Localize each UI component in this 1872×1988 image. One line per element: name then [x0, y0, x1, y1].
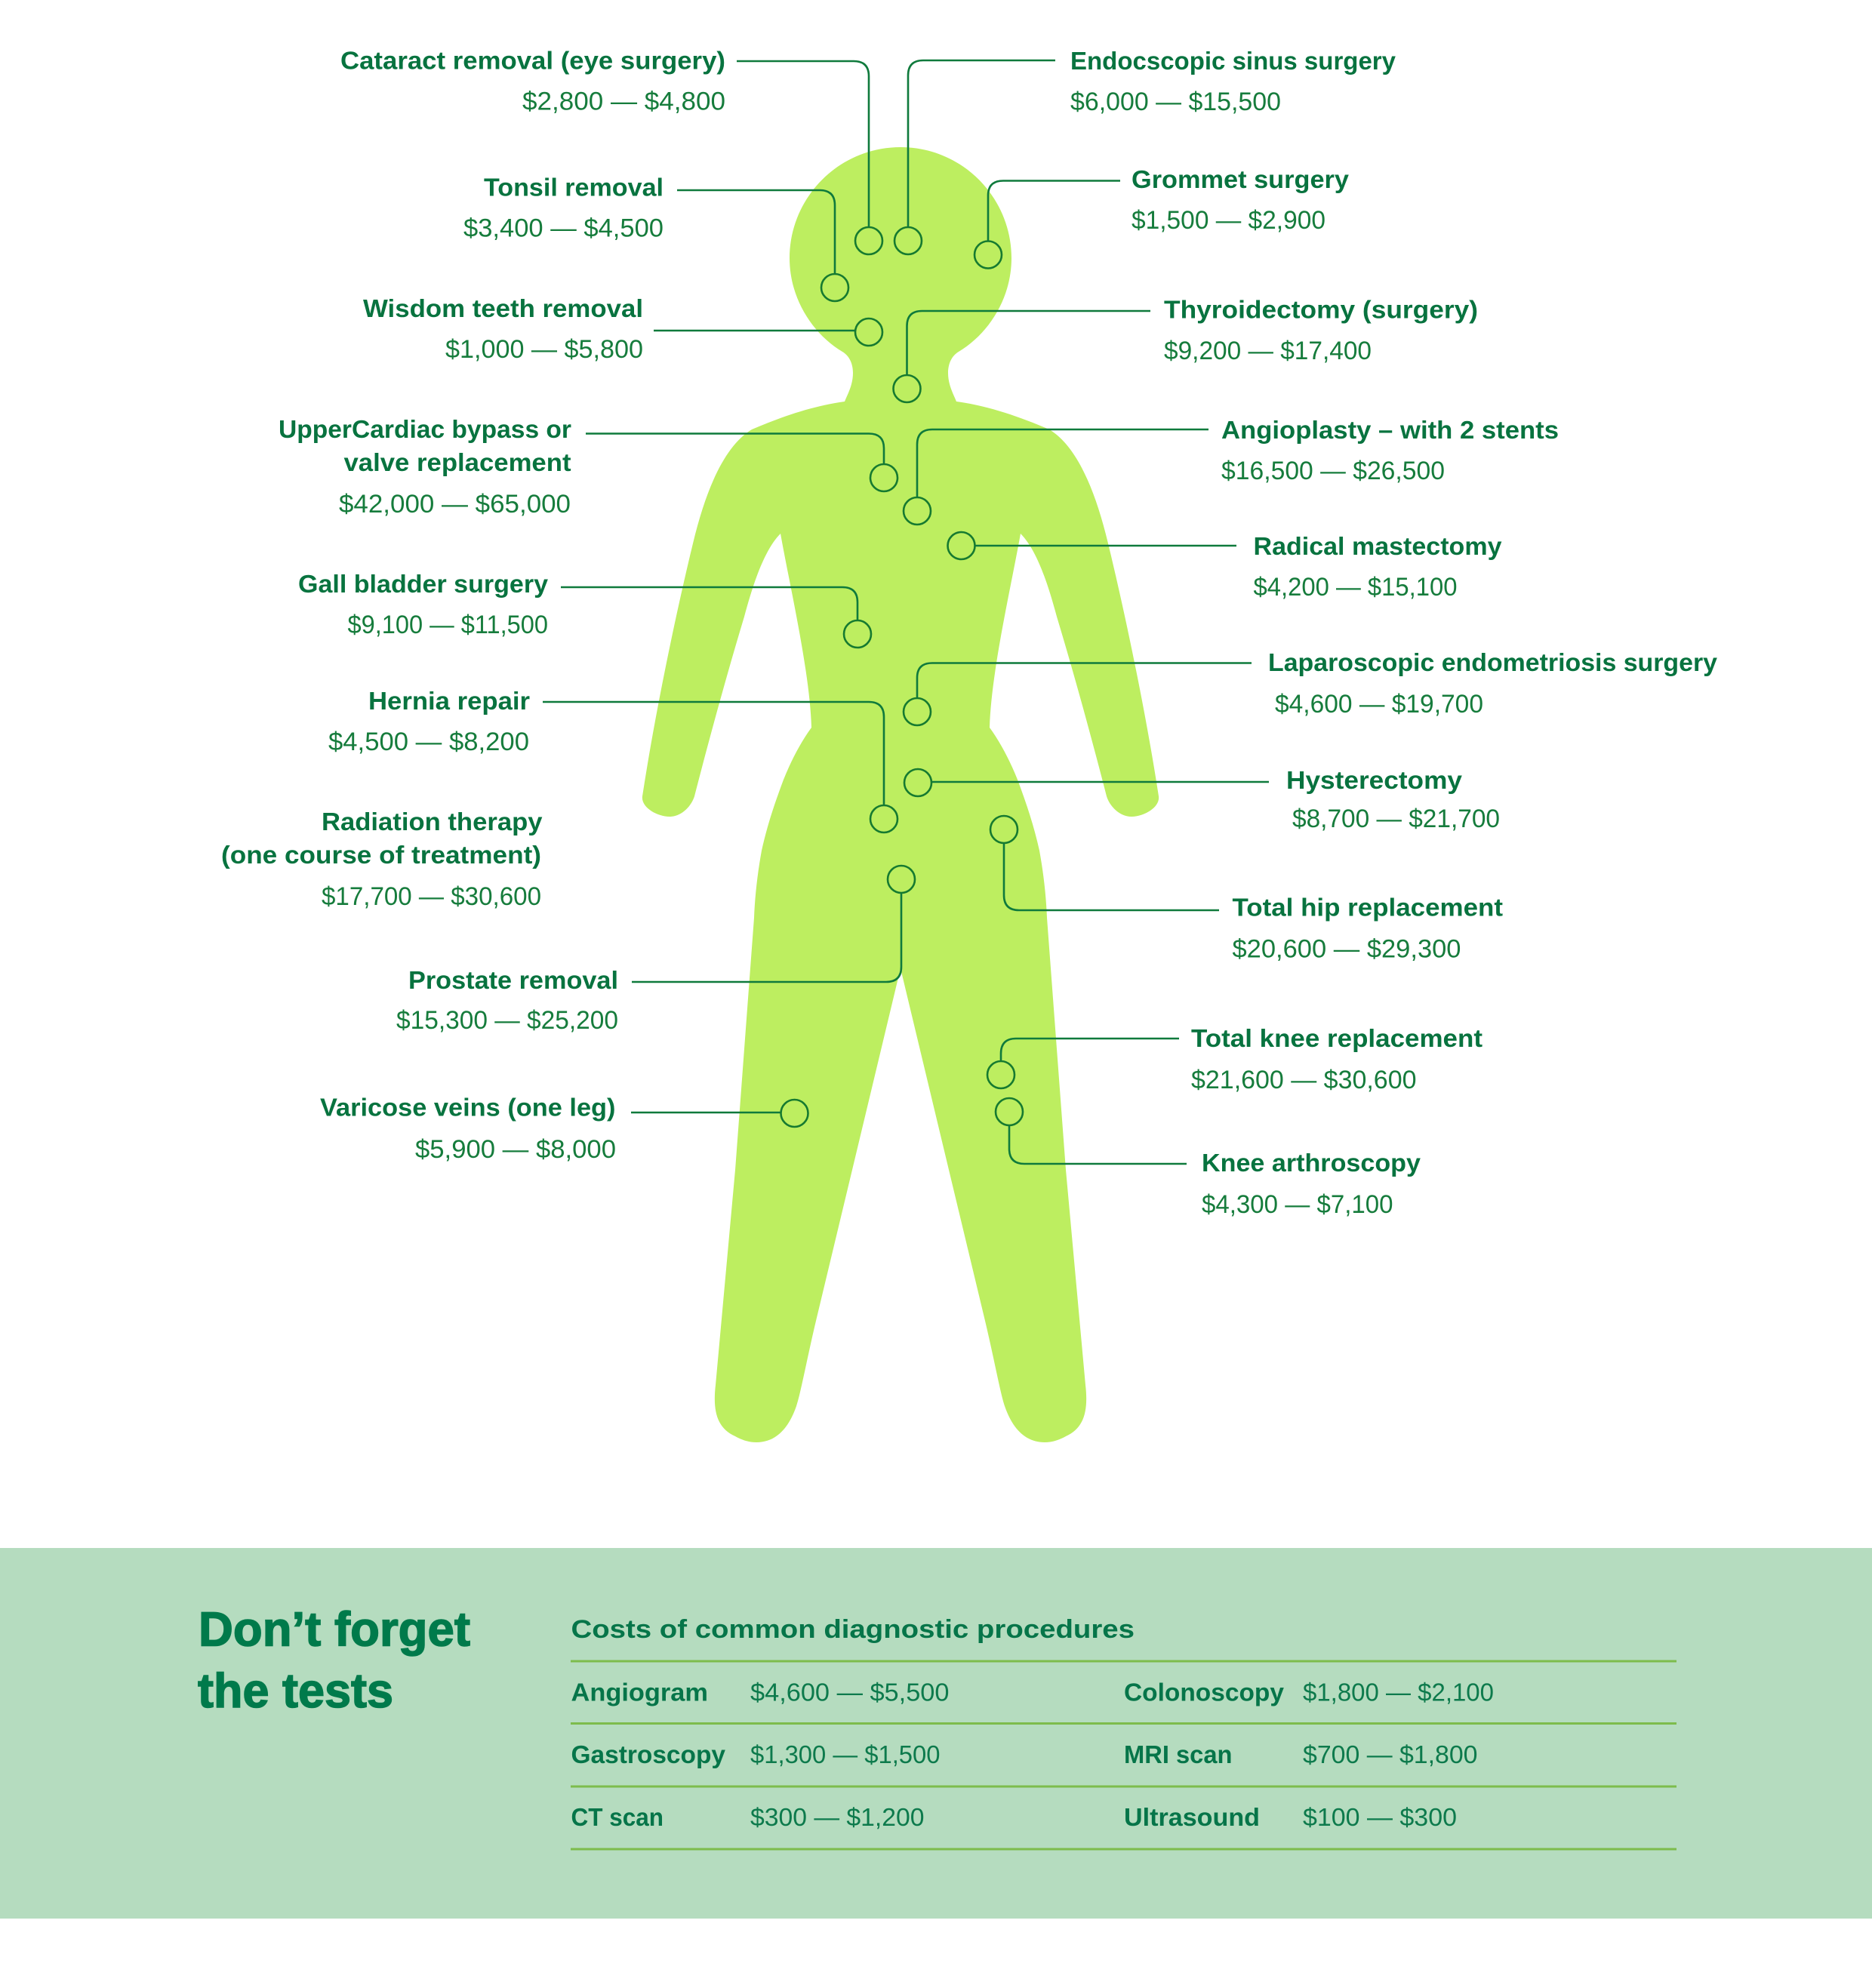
price: angioplasty: $16,500 — $26,500: [1221, 457, 1445, 485]
marker: radical mastectomy: [948, 532, 975, 559]
label: varicose veins: Varicose veins (one leg): [320, 1093, 616, 1122]
leader line: radical mastectomy: [975, 545, 1236, 546]
row: gastroscopy: Gastroscopy: [571, 1740, 726, 1768]
label: wisdom teeth removal: Wisdom teeth removal: [363, 294, 643, 322]
leader line: total hip replacement: [1004, 843, 1219, 910]
price: hernia repair: $4,500 — $8,200: [328, 728, 529, 756]
leader line: gall bladder surgery: [561, 587, 857, 620]
marker: total knee replacement: [987, 1061, 1015, 1088]
leader line: thyroidectomy: [907, 311, 1150, 375]
marker: grommet surgery: [974, 242, 1002, 269]
row: ct scan: CT scan: [571, 1803, 664, 1831]
label: angioplasty: Angioplasty – with 2 stents: [1221, 416, 1559, 444]
leader line: varicose veins: [631, 1112, 781, 1113]
callout: grommet surgery: [974, 165, 1350, 269]
price: total hip replacement: $20,600 — $29,300: [1232, 934, 1461, 963]
leader line: wisdom teeth removal: [654, 330, 855, 331]
label: total knee replacement: Total knee replacement: [1191, 1024, 1483, 1052]
label: radiation therapy line 2: (one course of treatment): [221, 841, 541, 869]
marker: tonsil removal: [821, 274, 848, 301]
callout: gall bladder surgery: [298, 570, 871, 648]
label: cataract removal: Cataract removal (eye surgery): [340, 47, 725, 74]
marker: gall bladder surgery: [844, 620, 871, 648]
marker: upper cardiac bypass: [870, 464, 898, 491]
callout: total hip replacement: [990, 816, 1503, 963]
label: gall bladder surgery: Gall bladder surgery: [298, 570, 549, 598]
row: colonoscopy: [1124, 1679, 1494, 1706]
price: prostate removal: $15,300 — $25,200: [396, 1006, 618, 1035]
label: radical mastectomy: Radical mastectomy: [1253, 532, 1502, 560]
price: upper cardiac bypass: $42,000 — $65,000: [339, 490, 571, 519]
price: cataract removal: $2,800 — $4,800: [522, 88, 725, 116]
row: ct scan: $300 — $1,200: [750, 1803, 924, 1831]
marker: knee arthroscopy: [996, 1098, 1023, 1125]
row: mri scan: [1124, 1740, 1478, 1768]
marker: varicose veins: [781, 1100, 808, 1127]
marker: prostate removal: [888, 866, 915, 893]
label: upper cardiac bypass line 1: UpperCardiac bypass or: [279, 415, 571, 443]
price: endoscopic sinus surgery: $6,000 — $15,500: [1070, 88, 1281, 116]
leader line: angioplasty: [917, 429, 1208, 497]
callout: laparoscopic endometriosis surgery: [904, 648, 1718, 725]
marker: endoscopic sinus surgery: [894, 227, 922, 254]
callout: prostate removal: [396, 866, 915, 1035]
callout: cataract removal: [340, 47, 882, 254]
callout: knee arthroscopy: [996, 1098, 1421, 1219]
callout: hysterectomy: [904, 766, 1500, 833]
callout: angioplasty: [904, 416, 1559, 525]
price: grommet surgery: $1,500 — $2,900: [1132, 206, 1325, 235]
marker: hernia repair: [870, 805, 898, 832]
row: mri scan: MRI scan: [1124, 1740, 1232, 1768]
callout: upper cardiac bypass: [279, 415, 898, 519]
price: laparoscopic endometriosis surgery: $4,600 — $19,700: [1275, 690, 1483, 719]
leader line: cataract removal: [737, 61, 869, 227]
panel: diagnostic tests: [0, 1548, 1872, 1919]
panel background: [0, 1548, 1872, 1919]
price: thyroidectomy: $9,200 — $17,400: [1164, 337, 1372, 365]
heading: don't forget the tests: Don’t forget: [199, 1602, 470, 1656]
subheading: costs of common diagnostic procedures: Costs of common diagnostic procedures: [571, 1615, 1135, 1644]
row: angiogram: Angiogram: [571, 1679, 708, 1706]
label: endoscopic sinus surgery: Endocscopic sinus surgery: [1070, 47, 1396, 75]
leader line: endoscopic sinus surgery: [908, 60, 1055, 227]
leader line: laparoscopic endometriosis surgery: [917, 663, 1252, 698]
leader line: knee arthroscopy: [1009, 1125, 1187, 1164]
heading: don't forget the tests: the tests: [198, 1663, 393, 1718]
row: angiogram: $4,600 — $5,500: [750, 1679, 950, 1706]
price: wisdom teeth removal: $1,000 — $5,800: [445, 335, 643, 364]
price: gall bladder surgery: $9,100 — $11,500: [347, 611, 548, 639]
row: gastroscopy: [571, 1740, 941, 1768]
label: tonsil removal: Tonsil removal: [484, 174, 664, 201]
row: ultrasound: $100 — $300: [1303, 1803, 1457, 1831]
leader line: upper cardiac bypass: [586, 433, 884, 464]
row: ct scan: [571, 1803, 924, 1831]
label: prostate removal: Prostate removal: [408, 966, 618, 994]
marker: laparoscopic endometriosis surgery: [904, 698, 931, 725]
marker: hysterectomy: [904, 769, 931, 796]
row: mri scan: $700 — $1,800: [1303, 1740, 1478, 1768]
callout: endoscopic sinus surgery: [894, 47, 1396, 254]
row: colonoscopy: $1,800 — $2,100: [1303, 1679, 1494, 1706]
label: total hip replacement: Total hip replacement: [1232, 894, 1503, 921]
row: ultrasound: Ultrasound: [1124, 1803, 1260, 1831]
leader line: hysterectomy: [931, 781, 1269, 783]
price: radiation therapy: $17,700 — $30,600: [322, 882, 541, 911]
label: laparoscopic endometriosis surgery: Laparoscopic endometriosis surgery: [1268, 648, 1718, 676]
callout: radical mastectomy: [948, 532, 1502, 602]
price: total knee replacement: $21,600 — $30,600: [1191, 1066, 1416, 1094]
row: colonoscopy: Colonoscopy: [1124, 1679, 1285, 1706]
price: knee arthroscopy: $4,300 — $7,100: [1202, 1190, 1393, 1219]
leader line: grommet surgery: [988, 181, 1120, 242]
price: radical mastectomy: $4,200 — $15,100: [1253, 573, 1457, 602]
label: upper cardiac bypass line 2: valve replacement: [344, 448, 571, 476]
row: angiogram: [571, 1679, 950, 1706]
label: grommet surgery: Grommet surgery: [1132, 165, 1350, 193]
callout: tonsil removal: [463, 174, 848, 301]
marker: wisdom teeth removal: [855, 319, 882, 346]
marker: angioplasty: [904, 497, 931, 525]
label: hysterectomy: Hysterectomy: [1286, 766, 1463, 794]
heading: don't forget the tests: [198, 1602, 470, 1718]
label: hernia repair: Hernia repair: [368, 687, 530, 715]
price: tonsil removal: $3,400 — $4,500: [463, 214, 664, 243]
callout: thyroidectomy: [894, 296, 1478, 402]
leader line: hernia repair: [543, 702, 884, 805]
label: thyroidectomy: Thyroidectomy (surgery): [1164, 296, 1478, 323]
marker: total hip replacement: [990, 816, 1018, 843]
callout: radiation therapy: [221, 808, 543, 911]
row: ultrasound: [1124, 1803, 1457, 1831]
callout: hernia repair: [328, 687, 898, 832]
callout: wisdom teeth removal: [363, 294, 882, 364]
callout: varicose veins: [320, 1093, 808, 1164]
row: gastroscopy: $1,300 — $1,500: [750, 1740, 941, 1768]
price: hysterectomy: $8,700 — $21,700: [1292, 805, 1500, 833]
label: knee arthroscopy: Knee arthroscopy: [1202, 1149, 1421, 1177]
label: radiation therapy line 1: Radiation therapy: [322, 808, 543, 836]
leader line: prostate removal: [632, 893, 901, 982]
callout: total knee replacement: [987, 1024, 1483, 1094]
marker: cataract removal: [855, 227, 882, 254]
marker: thyroidectomy: [894, 375, 921, 402]
leader line: tonsil removal: [677, 190, 835, 274]
human body silhouette: [642, 147, 1159, 1442]
price: varicose veins: $5,900 — $8,000: [415, 1135, 616, 1164]
leader line: total knee replacement: [1001, 1039, 1179, 1061]
